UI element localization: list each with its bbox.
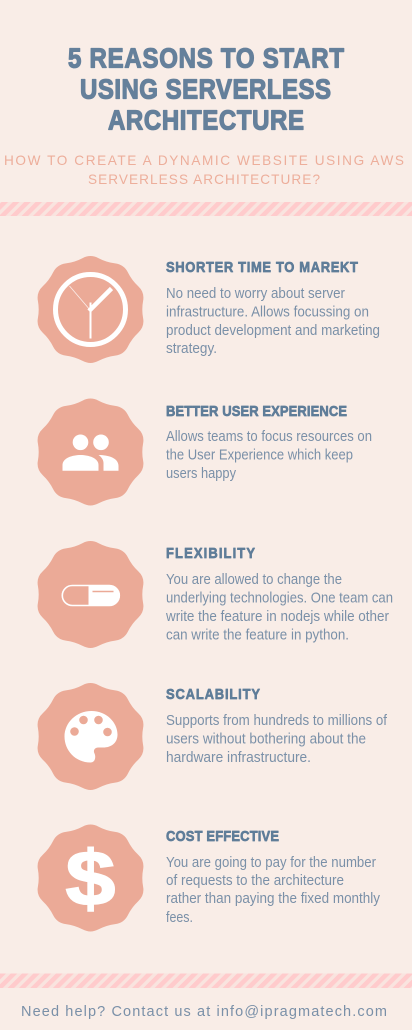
body text: rather than paying the fixed monthly	[166, 890, 380, 907]
icon: dollar badge: $	[66, 834, 115, 922]
body text: You are allowed to change the	[166, 571, 342, 588]
icon: users badge	[38, 398, 143, 506]
heading: SCALABILITY	[166, 685, 261, 702]
body text: strategy.	[166, 340, 217, 357]
body text: product development and marketing	[166, 322, 380, 339]
body text: You are going to pay for the number	[166, 854, 376, 871]
title	[68, 44, 344, 136]
title: 5 REASONS TO START	[68, 44, 344, 74]
body text	[166, 854, 380, 926]
body text	[166, 428, 372, 482]
body text: No need to worry about server	[166, 285, 345, 302]
section: flexibility	[38, 541, 393, 648]
body text	[166, 712, 388, 766]
icon: pill badge	[38, 541, 143, 648]
heading: FLEXIBILITY	[166, 544, 256, 561]
body text: can write the feature in python.	[166, 626, 349, 644]
icon: dollar badge	[38, 824, 143, 932]
top striped band	[0, 202, 412, 216]
section: shorter time to market	[38, 256, 380, 363]
body text: Supports from hundreds to millions of	[166, 712, 388, 729]
body text: write the feature in nodejs while other	[165, 608, 389, 625]
icon: clock badge	[38, 256, 143, 363]
heading: COST EFFECTIVE	[166, 827, 279, 844]
footer contact text: Need help? Contact us at info@ipragmatech.com	[21, 1004, 387, 1020]
title: USING SERVERLESS	[80, 75, 331, 105]
title: ARCHITECTURE	[108, 106, 304, 136]
heading: SHORTER TIME TO MAREKT	[166, 258, 358, 275]
subtitle: SERVERLESS ARCHITECTURE?	[88, 172, 320, 187]
body text: the User Experience which keep	[166, 446, 353, 464]
body text: users without bothering about the	[166, 731, 366, 748]
body text	[165, 571, 393, 644]
section: better user experience	[38, 398, 372, 506]
section: cost effective	[38, 824, 380, 932]
body text: of requests to the architecture	[166, 872, 344, 889]
icon: palette badge	[38, 683, 143, 790]
heading: BETTER USER EXPERIENCE	[166, 402, 347, 419]
body text	[166, 285, 380, 357]
subtitle: HOW TO CREATE A DYNAMIC WEBSITE USING AWS	[4, 153, 404, 168]
bottom striped band	[0, 974, 412, 988]
body text: infrastructure. Allows focussing on	[166, 304, 369, 320]
body text: Allows teams to focus resources on	[166, 428, 372, 445]
body text: users happy	[166, 465, 236, 482]
section: scalability	[38, 683, 388, 790]
body text: fees.	[166, 909, 193, 926]
body text: hardware infrastructure.	[166, 749, 311, 766]
subtitle	[4, 153, 404, 187]
